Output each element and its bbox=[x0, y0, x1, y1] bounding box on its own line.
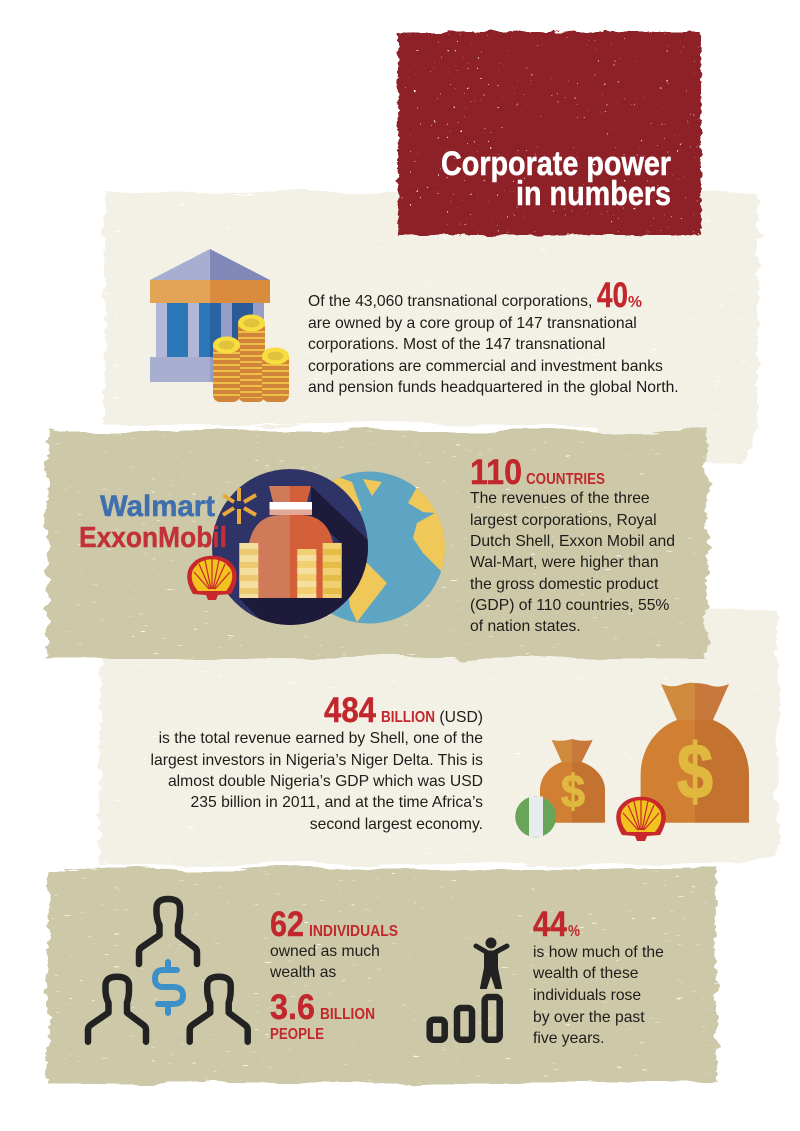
icon: Nigerian flag bbox=[515, 796, 556, 837]
panel: 110 countries bbox=[47, 431, 707, 658]
text: 44% statement: five years. bbox=[533, 1030, 604, 1047]
text: 62 individuals statement: wealth as bbox=[269, 964, 336, 981]
text: 110 countries statement: largest corporations, Royal bbox=[470, 512, 657, 529]
text: 40% statement bbox=[308, 276, 679, 396]
text: 44% statement: is how much of the bbox=[533, 944, 664, 961]
logo: Walmart: Walmart bbox=[100, 490, 215, 523]
icon: bank and coins bbox=[150, 249, 289, 402]
panel: 40% of corporations bbox=[105, 193, 758, 462]
text: 40% statement: corporations. Most of the 147 transnational bbox=[308, 336, 605, 353]
text: 484 billion statement: 484 bbox=[324, 691, 376, 730]
panel: wealth concentration bbox=[48, 869, 716, 1083]
text: 110 countries statement: Dutch Shell, Exxon Mobil and bbox=[470, 533, 675, 550]
icon: person on rising bars bbox=[430, 938, 507, 1040]
text: 40% statement: Of the 43,060 transnational corporations, bbox=[308, 293, 592, 310]
icon: three people and dollar sign bbox=[88, 899, 248, 1042]
text: 44% statement: individuals rose bbox=[533, 987, 641, 1004]
text: 40% statement: are owned by a core group of 147 transnational bbox=[308, 315, 637, 332]
text: 62 individuals statement: owned as much bbox=[270, 943, 380, 960]
title background red bbox=[398, 32, 701, 235]
title: Corporate power bbox=[441, 145, 671, 183]
title block bbox=[398, 32, 701, 235]
icon: money bag on navy circle bbox=[212, 469, 368, 630]
text: 110 countries statement: 110 bbox=[470, 453, 522, 492]
text: 484 billion statement: almost double Nigeria’s GDP which was USD bbox=[168, 773, 483, 790]
text: 110 countries statement bbox=[470, 453, 675, 635]
text: 44% statement: % bbox=[568, 923, 580, 940]
logo: Walmart bbox=[100, 488, 256, 524]
icon: small money bag: $ bbox=[561, 765, 585, 817]
text: 110 countries statement: Wal-Mart, were higher than bbox=[470, 554, 659, 571]
panel background cream bbox=[105, 193, 758, 462]
text: 484 billion statement: second largest economy. bbox=[310, 816, 483, 833]
panel background khaki bbox=[47, 431, 707, 658]
text: 110 countries statement: COUNTRIES bbox=[526, 471, 605, 488]
panel: 484 billion bbox=[100, 610, 778, 865]
text: 44% statement: 44 bbox=[533, 905, 567, 944]
text: 40% statement: % bbox=[628, 294, 642, 311]
text: 40% statement: corporations are commercial and investment banks bbox=[308, 358, 663, 375]
text: 44% statement: wealth of these bbox=[532, 965, 639, 982]
title bbox=[441, 145, 671, 213]
icon: globe bbox=[331, 472, 445, 624]
text: 44% statement bbox=[532, 905, 664, 1047]
text: 484 billion statement bbox=[151, 691, 483, 833]
text: 484 billion statement: is the total revenue earned by Shell, one of the bbox=[159, 730, 483, 747]
text: 40% statement: 40 bbox=[597, 276, 628, 315]
text: 62 individuals statement bbox=[269, 905, 398, 1043]
icon: large money bag bbox=[641, 683, 749, 823]
logo: ExxonMobil: ExxonMobil bbox=[79, 522, 227, 554]
icon: large money bag: $ bbox=[677, 727, 713, 815]
text: 110 countries statement: The revenues of the three bbox=[470, 490, 650, 507]
text: 62 individuals statement: 3.6 bbox=[270, 988, 315, 1027]
panel background cream bbox=[100, 610, 778, 865]
text: 44% statement: by over the past bbox=[533, 1009, 645, 1026]
logo: Shell bbox=[187, 556, 237, 600]
text: 62 individuals statement: BILLION bbox=[320, 1006, 375, 1023]
icon: small money bag bbox=[540, 739, 605, 823]
text: 110 countries statement: (GDP) of 110 countries, 55% bbox=[470, 597, 669, 614]
text: 62 individuals statement: INDIVIDUALS bbox=[309, 923, 398, 940]
text: 62 individuals statement: 62 bbox=[270, 905, 304, 944]
text: 484 billion statement: BILLION bbox=[381, 709, 435, 726]
text: 484 billion statement: (USD) bbox=[439, 709, 483, 726]
text: 62 individuals statement: PEOPLE bbox=[270, 1026, 324, 1043]
text: 484 billion statement: 235 billion in 2011, and at the time Africa’s bbox=[191, 794, 483, 811]
text: 110 countries statement: of nation states. bbox=[470, 618, 581, 635]
icon: Shell logo bbox=[616, 797, 666, 841]
title: in numbers bbox=[516, 175, 671, 213]
text: 40% statement: and pension funds headquartered in the global North. bbox=[308, 379, 679, 396]
text: 110 countries statement: the gross domestic product bbox=[470, 576, 659, 593]
panel background khaki bbox=[48, 869, 716, 1083]
text: 484 billion statement: largest investors in Nigeria’s Niger Delta. This is bbox=[151, 752, 483, 769]
